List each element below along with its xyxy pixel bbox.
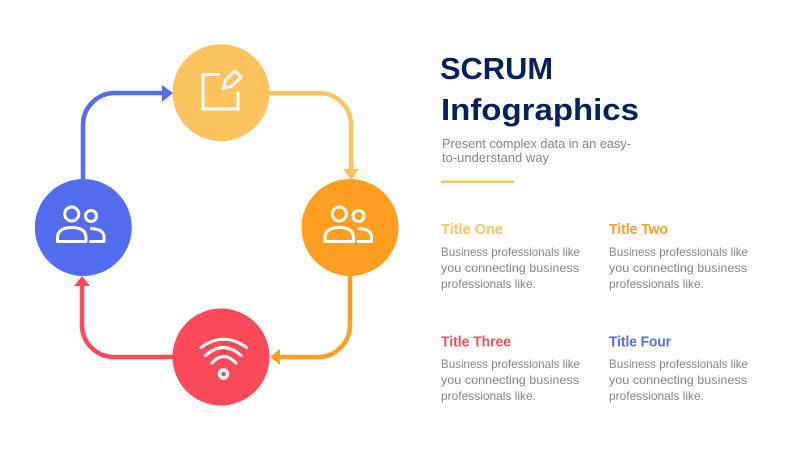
- text block: title one: Business professionals like: [441, 245, 580, 259]
- text block: title three: [441, 334, 580, 403]
- text block: title two: [609, 222, 748, 291]
- title: SCRUM: [440, 51, 553, 86]
- text block: title two: Title Two: [609, 222, 668, 238]
- node: red circle with wifi icon: [172, 308, 270, 406]
- subtitle: Present complex data in an easy-: [442, 137, 631, 151]
- text block: title four: you connecting business: [609, 373, 747, 387]
- text block: title four: Title Four: [609, 334, 671, 350]
- arrow: blue to yellow: [83, 85, 173, 182]
- icon: people: [325, 207, 372, 242]
- text block: title one: Title One: [441, 222, 503, 238]
- text block: title two: Business professionals like: [609, 245, 748, 259]
- icon: wifi: [201, 339, 246, 378]
- text block: title four: [609, 334, 748, 403]
- title: [440, 51, 639, 127]
- icon: people: [58, 207, 104, 242]
- text block: title three: Title Three: [441, 334, 511, 350]
- node: yellow circle with note icon: [172, 44, 270, 141]
- text block: title three: Business professionals like: [441, 357, 580, 371]
- icon: note and pencil: [203, 71, 241, 109]
- text block: title one: [441, 222, 580, 291]
- text block: title three: you connecting business: [441, 373, 579, 387]
- node: blue circle with people icon: [35, 179, 132, 276]
- text block: title two: you connecting business: [609, 261, 747, 275]
- text block: title three: professionals like.: [441, 389, 536, 403]
- arrow: yellow to orange: [268, 93, 359, 180]
- node: orange circle with people icon: [302, 179, 398, 276]
- text block: title two: professionals like.: [609, 277, 704, 291]
- cycle diagram: [35, 44, 399, 405]
- text block: title four: professionals like.: [609, 389, 704, 403]
- subtitle: to-understand way: [442, 151, 550, 165]
- text block: title one: professionals like.: [441, 277, 536, 291]
- text block: title four: Business professionals like: [609, 357, 748, 371]
- arrow: red to blue: [74, 276, 174, 357]
- title: Infographics: [441, 92, 639, 127]
- arrow: orange to red: [270, 275, 350, 365]
- accent rule: [441, 180, 514, 183]
- subtitle: [442, 137, 631, 165]
- text block: title one: you connecting business: [441, 261, 579, 275]
